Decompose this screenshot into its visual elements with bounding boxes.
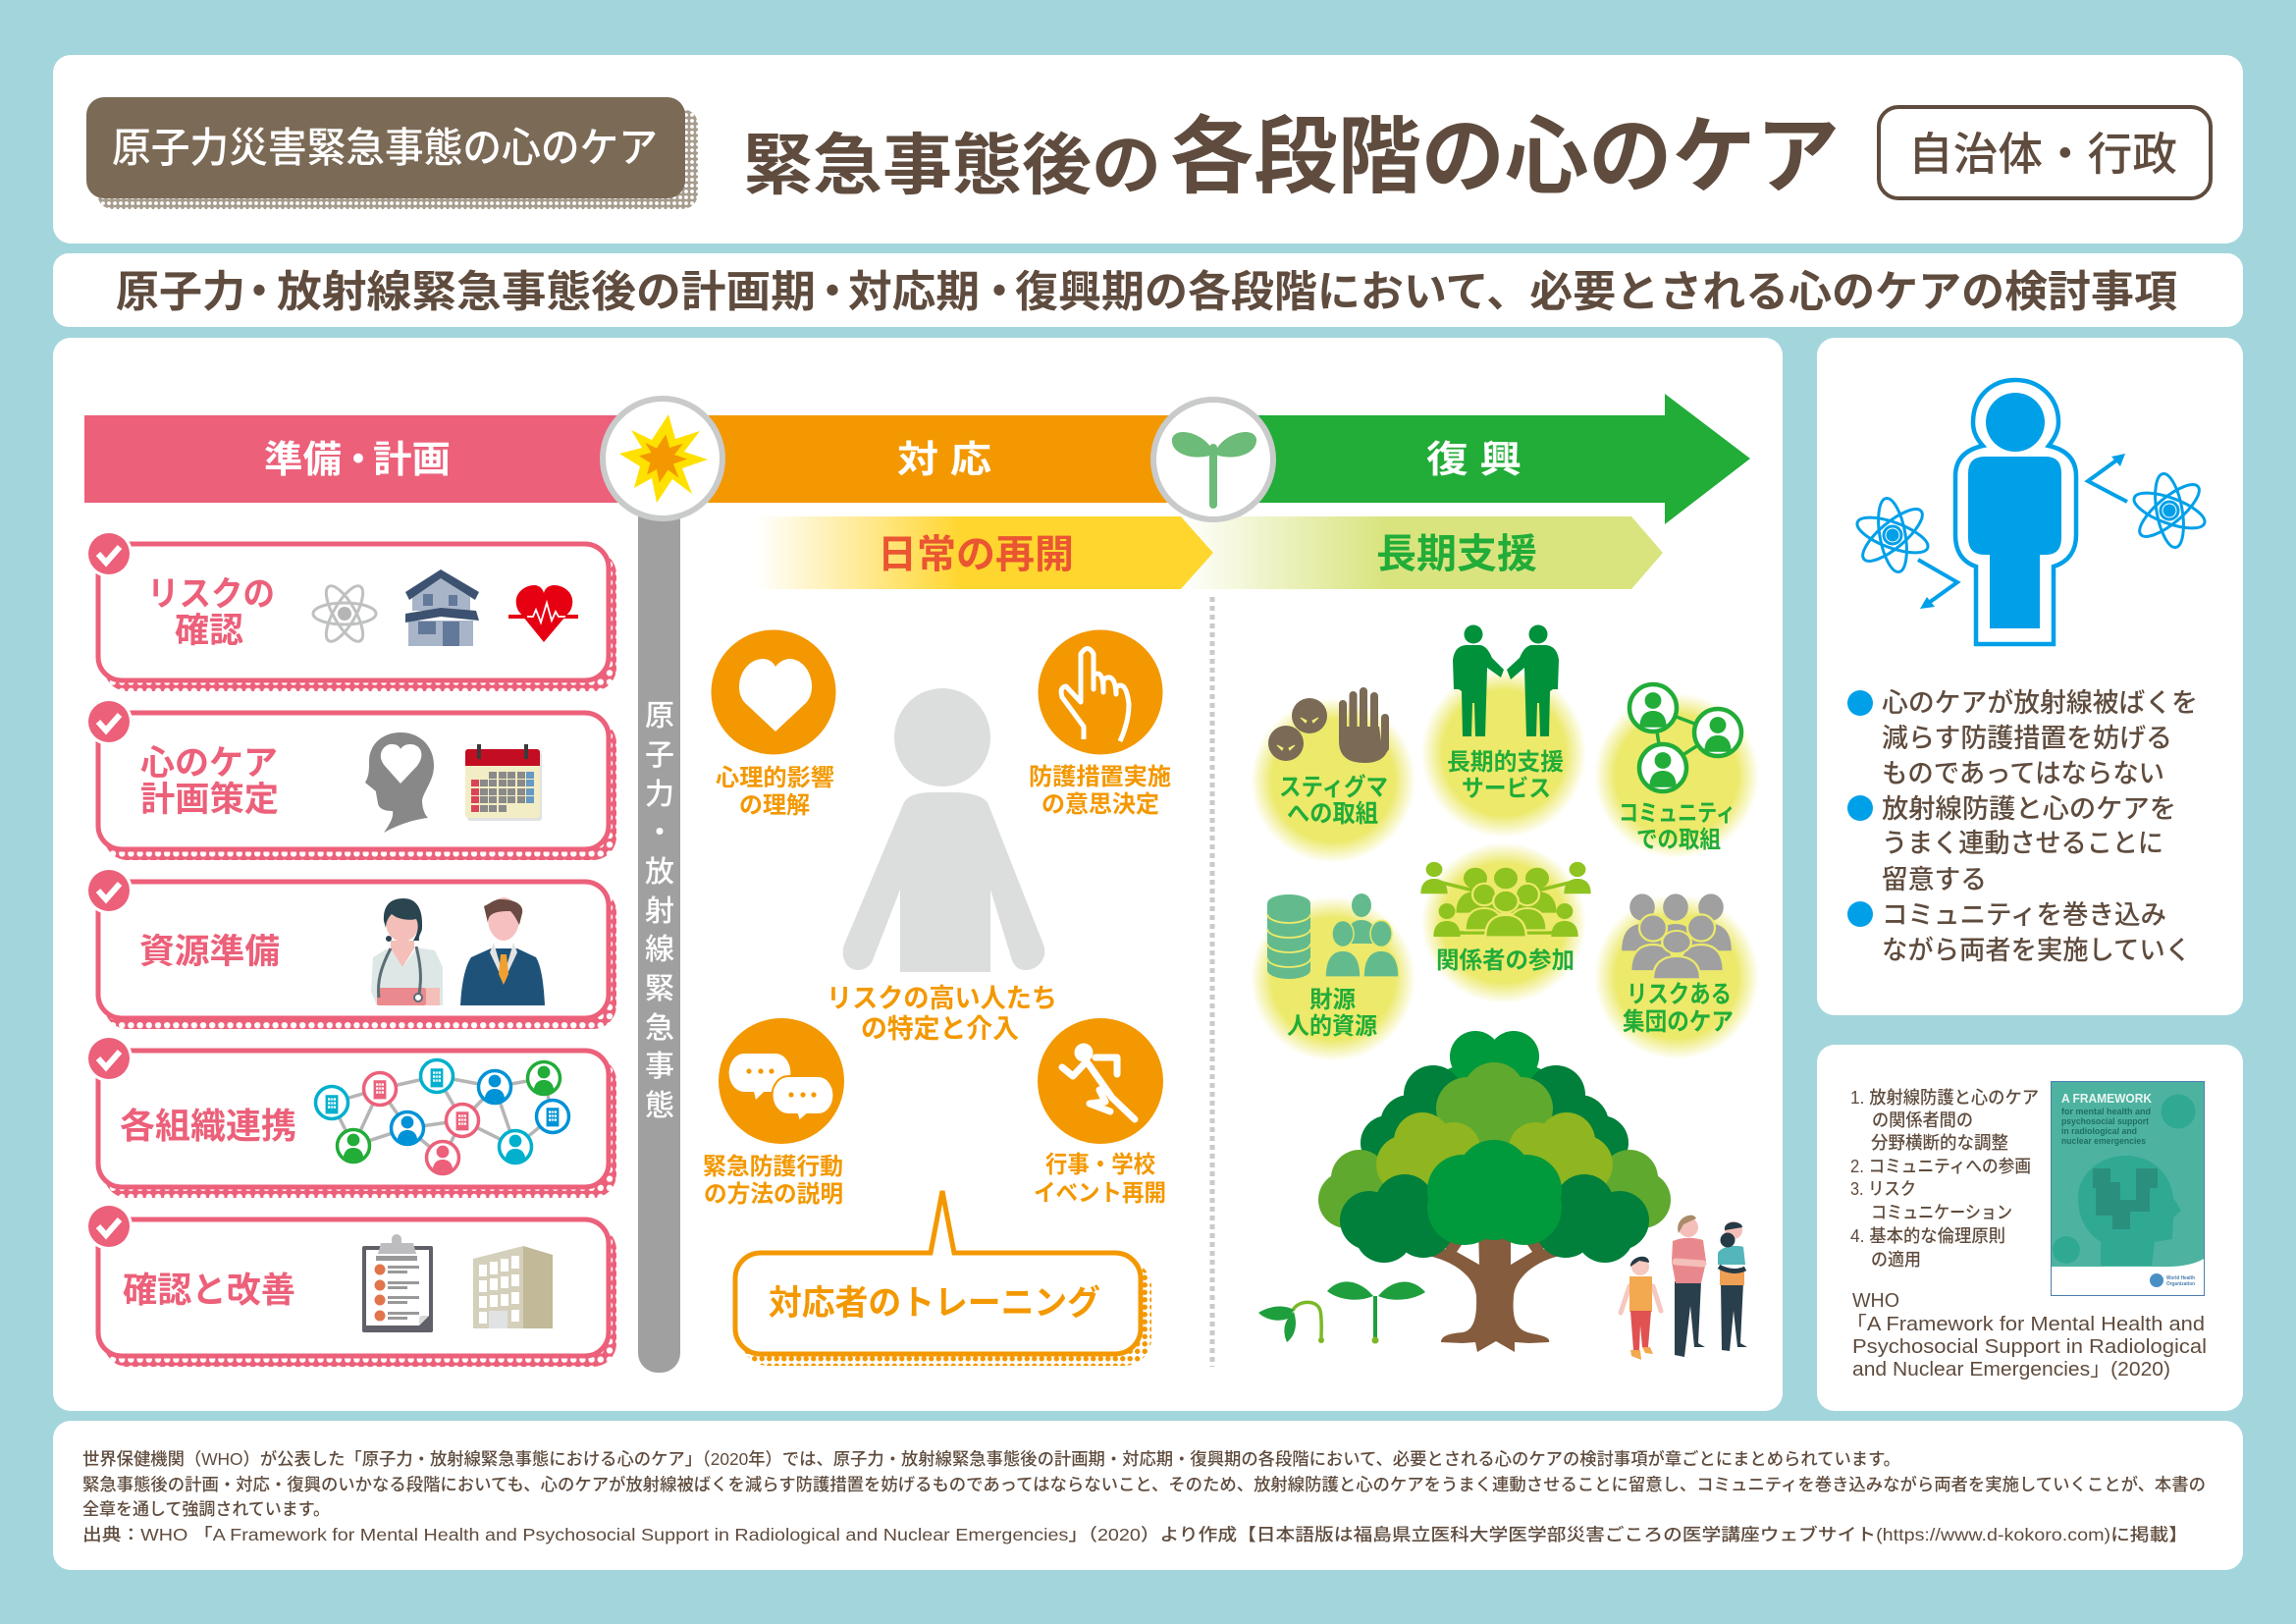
citation: 「A Framework for Mental Health and bbox=[1845, 1313, 2205, 1335]
panel: main diagram bbox=[53, 338, 1783, 1411]
item: community-level efforts: での取組 bbox=[1636, 827, 1721, 853]
icon: atom bbox=[313, 581, 376, 646]
icon: sprout in circle bbox=[1153, 400, 1273, 519]
item: long-term support services bbox=[1421, 624, 1586, 838]
label: identifying high-risk people bbox=[827, 984, 1057, 1044]
chapter list: 4. 基本的な倫理原則 bbox=[1850, 1226, 2005, 1246]
item: decision on protective measures: 防護措置実施 bbox=[1029, 764, 1171, 790]
vertical bar: nuclear radiological emergency: 線 bbox=[645, 934, 674, 966]
item: explaining protective action: 緊急防護行動 bbox=[703, 1154, 843, 1180]
panel: subtitle strip bbox=[53, 253, 2243, 327]
father bbox=[1672, 1216, 1706, 1357]
citation: and Nuclear Emergencies」(2020) bbox=[1852, 1359, 2170, 1380]
chapter list: 2. コミュニティへの参画 bbox=[1850, 1157, 2031, 1176]
book cover: World Health bbox=[2166, 1275, 2196, 1281]
label: 資源準備 bbox=[139, 933, 280, 971]
chapter list: 分野横断的な調整 bbox=[1871, 1133, 2008, 1153]
phase: preparation and planning: 準備 bbox=[264, 440, 342, 481]
icon: atom right bbox=[2130, 471, 2209, 550]
item: resuming events and school: イベント再開 bbox=[1034, 1180, 1166, 1207]
label: identifying high-risk people: リスクの高い人たち bbox=[827, 984, 1057, 1013]
label: 心のケア bbox=[140, 744, 278, 783]
response phase: central person figure bbox=[843, 688, 1044, 972]
subtitle: 復興期の各段階において、必要とされる心のケアの検討事項 bbox=[1015, 268, 2177, 316]
check mark bbox=[85, 698, 133, 745]
phase: preparation and planning bbox=[84, 415, 673, 503]
item: financial and human resources bbox=[1251, 893, 1415, 1061]
chapter list: の関係者間の bbox=[1872, 1110, 1973, 1130]
label: 計画策定 bbox=[140, 781, 279, 819]
phase: recovery bbox=[1213, 394, 1750, 524]
item: explaining protective action: の方法の説明 bbox=[704, 1181, 843, 1208]
citation: Psychosocial Support in Radiological bbox=[1852, 1336, 2207, 1358]
subtitle: 対応期 bbox=[848, 268, 980, 316]
icon: calendar bbox=[465, 744, 542, 821]
item: stakeholder participation: 関係者の参加 bbox=[1436, 947, 1575, 974]
book cover bbox=[2052, 1082, 2205, 1296]
check mark bbox=[85, 1203, 133, 1250]
book cover: in radiological and bbox=[2061, 1126, 2137, 1137]
item: care for at-risk groups: リスクある bbox=[1627, 981, 1732, 1008]
item: resuming events and school bbox=[1034, 1018, 1166, 1207]
footer text bbox=[82, 1449, 2206, 1544]
item: decision on protective measures bbox=[1029, 630, 1171, 818]
subtitle: ・ bbox=[238, 268, 281, 316]
arrow: deflected right bbox=[2088, 454, 2127, 502]
icon: organisation network bbox=[316, 1060, 569, 1174]
callout: responder training: 対応者のトレーニング bbox=[769, 1284, 1100, 1323]
item: resuming events and school: 行事・学校 bbox=[1045, 1152, 1155, 1178]
item: psychological impact: 心理的影響 bbox=[716, 765, 834, 791]
footer text: 出典：WHO 「A Framework for Mental Health and Psychosocial Support in Radiological and Nuclear Emergencies」（2020）より作成【日本語版は福島県立医科大学医学部災害ごころの医学講座ウェブサイト(https://www.d-kokoro.com)に掲載】 bbox=[82, 1525, 2188, 1544]
tag: municipalities and government bbox=[1879, 107, 2211, 198]
vertical bar: nuclear radiological emergency: 態 bbox=[645, 1090, 674, 1122]
badge: nuclear disaster mental care bbox=[86, 97, 698, 209]
chapter list: 3. リスク bbox=[1850, 1179, 1916, 1199]
bullet three: ながら両者を実施していく bbox=[1882, 936, 2191, 965]
icon: sprouts bbox=[1258, 1281, 1425, 1343]
footer text: 緊急事態後の計画・対応・復興のいかなる段階においても、心のケアが放射線被ばくを減らす防護措置を妨げるものであってはならないこと、そのため、放射線防護と心のケアをうまく連動させることに留意し、コミュニティを巻き込みながら両者を実施していくことが、本書の bbox=[82, 1475, 2206, 1494]
bullet one: 心のケアが放射線被ばくを bbox=[1882, 688, 2198, 718]
bullet one bbox=[1847, 688, 2198, 788]
arrow: deflected left bbox=[1918, 560, 1957, 609]
icon: atom left bbox=[1853, 496, 1932, 574]
icon: doctor bbox=[371, 898, 443, 1005]
chapter list: コミュニケーション bbox=[1871, 1203, 2012, 1222]
item: addressing stigma: スティグマ bbox=[1279, 773, 1388, 801]
chapter list: 1. 放射線防護と心のケア bbox=[1850, 1088, 2039, 1108]
label: リスクの bbox=[147, 575, 275, 614]
item: community-level efforts: コミュニティ bbox=[1619, 800, 1735, 827]
phase: recovery: 復 興 bbox=[1426, 440, 1522, 481]
item: long-term support services: 長期的支援 bbox=[1447, 749, 1564, 776]
band: return to daily life: 日常の再開 bbox=[878, 533, 1074, 576]
label bbox=[140, 744, 279, 819]
check mark bbox=[85, 867, 133, 914]
bullet three bbox=[1847, 900, 2191, 965]
item: financial and human resources: 財源 bbox=[1309, 987, 1356, 1013]
vertical bar: nuclear radiological emergency: 子 bbox=[645, 739, 674, 772]
title bbox=[743, 110, 1840, 204]
vertical bar: nuclear radiological emergency: 射 bbox=[645, 895, 674, 928]
item: decision on protective measures: の意思決定 bbox=[1041, 791, 1159, 818]
panel: key points bbox=[1817, 338, 2243, 1015]
subtitle: 原子力 bbox=[116, 268, 245, 316]
item: explaining protective action bbox=[703, 1018, 844, 1208]
label: identifying high-risk people: の特定と介入 bbox=[861, 1014, 1019, 1044]
book cover: A FRAMEWORK bbox=[2061, 1091, 2153, 1106]
phase: response bbox=[667, 415, 1217, 503]
book cover: psychosocial support bbox=[2061, 1116, 2150, 1127]
label: 確認と改善 bbox=[123, 1270, 295, 1310]
timeline arrow bbox=[84, 394, 1750, 524]
chapter list bbox=[1850, 1088, 2039, 1270]
title: 緊急事態後の bbox=[743, 129, 1161, 203]
citation bbox=[1845, 1290, 2207, 1380]
mother holding baby bbox=[1718, 1221, 1747, 1351]
item: financial and human resources: 人的資源 bbox=[1287, 1013, 1377, 1040]
bullet two: うまく連動させることに bbox=[1882, 829, 2163, 858]
check mark bbox=[85, 530, 133, 577]
bullet two bbox=[1847, 794, 2176, 894]
bullet two: 放射線防護と心のケアを bbox=[1882, 794, 2176, 824]
item: addressing stigma bbox=[1251, 691, 1415, 863]
book cover: for mental health and bbox=[2061, 1107, 2151, 1117]
label: 各組織連携 bbox=[120, 1106, 296, 1146]
icon: family bbox=[1621, 1216, 1747, 1360]
item: addressing stigma: への取組 bbox=[1287, 800, 1378, 828]
icon: explosion in circle bbox=[603, 399, 722, 518]
citation: WHO bbox=[1852, 1290, 1899, 1312]
card: resource preparation bbox=[85, 867, 616, 1029]
card: mental care planning bbox=[85, 698, 616, 860]
icon: checklist clipboard bbox=[362, 1234, 433, 1332]
label bbox=[147, 575, 275, 650]
subtitle: 放射線緊急事態後の計画期 bbox=[277, 268, 816, 316]
icon: large tree bbox=[1318, 1031, 1671, 1352]
bullet three: コミュニティを巻き込み bbox=[1882, 900, 2166, 930]
vertical bar: nuclear radiological emergency: 緊 bbox=[645, 973, 674, 1005]
vertical bar: nuclear radiological emergency: 事 bbox=[645, 1051, 674, 1083]
band: long-term support bbox=[1181, 516, 1663, 589]
vertical bar: nuclear radiological emergency: ・ bbox=[645, 817, 674, 849]
bullet one: ものであってはならない bbox=[1882, 759, 2164, 788]
phase: preparation and planning: 計画 bbox=[373, 440, 451, 481]
vertical bar: nuclear radiological emergency: 急 bbox=[645, 1012, 674, 1045]
icon: businessman bbox=[460, 897, 545, 1005]
item: psychological impact bbox=[711, 630, 836, 819]
band: long-term support: 長期支援 bbox=[1376, 531, 1537, 576]
item: long-term support services: サービス bbox=[1462, 776, 1551, 802]
bullet two: 留意する bbox=[1882, 865, 1987, 894]
item: stakeholder participation bbox=[1420, 842, 1591, 1003]
child bbox=[1621, 1257, 1661, 1360]
icon: heartbeat bbox=[508, 585, 578, 642]
chapter list: の適用 bbox=[1871, 1250, 1921, 1270]
band: return to daily life bbox=[757, 516, 1213, 589]
phase: response: 対 応 bbox=[897, 440, 991, 481]
check mark bbox=[85, 1035, 133, 1082]
footer text: 世界保健機関（WHO）が公表した「原子力・放射線緊急事態における心のケア」（2020年）では、原子力・放射線緊急事態後の計画期・対応期・復興期の各段階において、必要とされる心のケアの検討事項が章ごとにまとめられています。 bbox=[82, 1449, 1900, 1469]
panel: footer notes bbox=[53, 1421, 2243, 1570]
title: 各段階の心のケア bbox=[1170, 110, 1840, 204]
divider dotted bbox=[1209, 597, 1215, 1367]
item: care for at-risk groups bbox=[1594, 893, 1759, 1059]
phase: preparation and planning: ・ bbox=[340, 440, 377, 481]
card: risk assessment bbox=[85, 530, 616, 691]
label: 確認 bbox=[175, 612, 243, 650]
card: review and improvement bbox=[85, 1203, 616, 1367]
book cover: Organization bbox=[2166, 1281, 2196, 1287]
subtitle: ・ bbox=[978, 268, 1021, 316]
vertical bar: nuclear radiological emergency: 原 bbox=[645, 700, 674, 732]
icon: person shielded from radiation bbox=[1955, 380, 2076, 644]
item: care for at-risk groups: 集団のケア bbox=[1623, 1008, 1734, 1036]
tag: municipalities and government: 自治体・行政 bbox=[1908, 129, 2177, 180]
vertical bar: nuclear radiological emergency: 放 bbox=[645, 856, 674, 889]
bullet one: 減らす防護措置を妨げる bbox=[1882, 724, 2172, 753]
vertical bar: nuclear radiological emergency: 力 bbox=[645, 779, 674, 811]
card: inter-organisation cooperation bbox=[85, 1035, 616, 1198]
panel: header bbox=[53, 55, 2243, 244]
panel: framework reference bbox=[1817, 1045, 2243, 1411]
subtitle: ・ bbox=[811, 268, 854, 316]
item: psychological impact: の理解 bbox=[739, 792, 810, 819]
icon: head with heart bbox=[365, 732, 434, 833]
key points list bbox=[1847, 688, 2198, 965]
icon: damaged house bbox=[405, 569, 479, 646]
footer text: 全章を通して強調されています。 bbox=[82, 1499, 330, 1519]
badge: nuclear disaster mental care: 原子力災害緊急事態の心のケア bbox=[112, 125, 658, 171]
vertical bar: nuclear radiological emergency bbox=[638, 471, 680, 1373]
item: community-level efforts bbox=[1594, 684, 1759, 858]
icon: office building bbox=[473, 1246, 553, 1328]
book cover: nuclear emergencies bbox=[2061, 1136, 2146, 1147]
subtitle bbox=[116, 268, 2177, 316]
callout: responder training bbox=[735, 1191, 1151, 1366]
